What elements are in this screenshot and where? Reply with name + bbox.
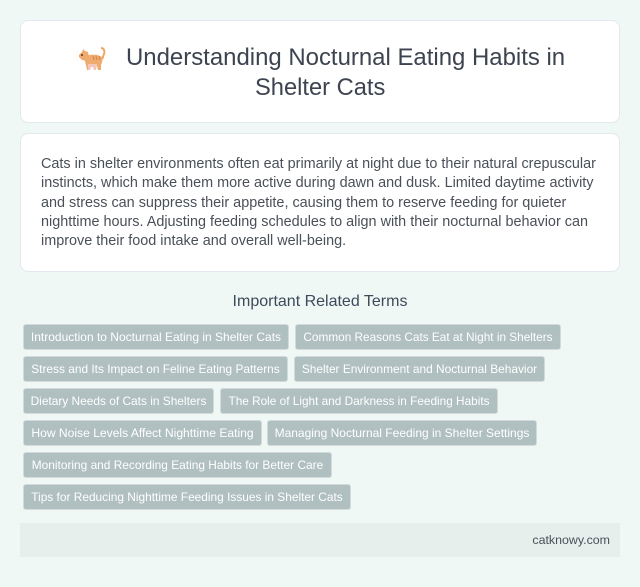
title text: Understanding Nocturnal Eating Habits in <box>126 44 565 71</box>
tag <box>295 324 561 350</box>
tag: Shelter Environment and Nocturnal Behavior <box>302 362 537 376</box>
footer bar <box>20 523 620 557</box>
tag: Managing Nocturnal Feeding in Shelter Settings <box>275 426 529 440</box>
panel: description card <box>20 133 620 272</box>
description text: instincts, which make them more active during dawn and dusk. Limited daytime activity <box>41 175 593 191</box>
tag <box>294 356 545 382</box>
tag: Monitoring and Recording Eating Habits for Better Care <box>32 458 323 472</box>
tag <box>220 388 498 414</box>
tag: Introduction to Nocturnal Eating in Shelter Cats <box>31 330 281 344</box>
tag: The Role of Light and Darkness in Feeding Habits <box>228 394 490 408</box>
panel: title card: Shelter Cats <box>255 75 385 101</box>
description text <box>41 156 596 249</box>
description text: improve their food intake and overall well-being. <box>41 233 346 249</box>
tag: How Noise Levels Affect Nighttime Eating <box>31 426 254 440</box>
tag <box>267 420 537 446</box>
icon: cat <box>79 47 106 70</box>
tag: Dietary Needs of Cats in Shelters <box>31 394 206 408</box>
tag <box>23 356 288 382</box>
tag list <box>23 324 561 510</box>
tag <box>23 324 289 350</box>
tag <box>23 388 214 414</box>
description text: Cats in shelter environments often eat primarily at night due to their natural crepuscular <box>41 156 596 172</box>
tag: Stress and Its Impact on Feline Eating Patterns <box>31 362 280 376</box>
panel: title card <box>20 20 620 123</box>
tag <box>23 420 262 446</box>
footer site name: catknowy.com <box>532 533 610 547</box>
description text: nighttime hours. Adjusting feeding schedules to align with their nocturnal behavior can <box>41 214 588 230</box>
tag: Common Reasons Cats Eat at Night in Shelters <box>303 330 553 344</box>
heading: related terms: Important Related Terms <box>233 293 407 310</box>
tag: Tips for Reducing Nighttime Feeding Issues in Shelter Cats <box>31 490 343 504</box>
tag <box>23 484 351 510</box>
description text: and stress can suppress their appetite, causing them to reserve feeding for quieter <box>41 195 566 211</box>
tag <box>23 452 332 478</box>
